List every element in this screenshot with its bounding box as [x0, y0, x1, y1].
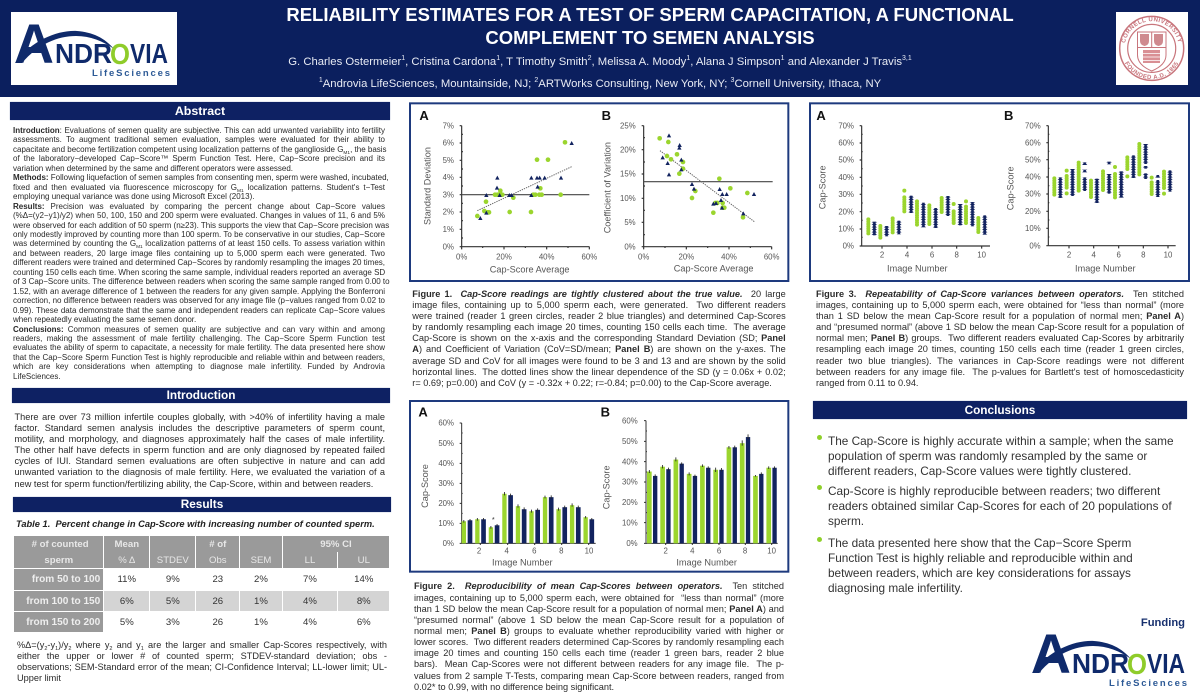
chart: 2A bars less than normal: 30% — [438, 479, 454, 488]
chart: 2A bars less than normal — [418, 405, 596, 568]
chart: 1B coefficient of variation scatter: Coefficient of Variation — [603, 142, 613, 233]
chart: 3A variance less than normal — [816, 108, 990, 274]
conclusion bullet 1: different readers, Cap-Score values were tightly clustered. — [828, 464, 1131, 478]
chart: 3A variance less than normal: A — [816, 108, 826, 123]
table 1: 5% — [166, 596, 180, 606]
chart: 2B bars presumed normal: Image Number — [676, 558, 737, 568]
chart: 2A bars less than normal: 20% — [438, 499, 454, 508]
heading: Abstract — [10, 102, 390, 120]
table 1: % Δ — [118, 554, 135, 566]
text block: introduction: The other half have defects in sperm function and are only diagnosed by repeated failed — [14, 445, 385, 455]
chart: 1B coefficient of variation scatter: 0% — [624, 242, 636, 251]
text block: abstract: 1.52, with an average difference of 1 between the readers for any given sample. Applying the Bonferroni — [13, 287, 385, 296]
text block: introduction: unwanted variation to the diagnosis of male fertility. Here, we evaluated the variation of a — [14, 467, 385, 477]
chart: 1A standard deviation scatter: Standard Deviation — [423, 147, 433, 225]
conclusion bullet 2: readers obtained similar Cap-Scores for each of 20 populations of — [828, 499, 1172, 513]
figure 2 caption: values from 2 sample T-Tests, comparing mean Cap-Score between readers, ranged from — [414, 671, 784, 681]
chart: 2A bars less than normal: 2 — [477, 547, 481, 556]
text block: abstract: correction, no difference between readers was observed for any image file (p−values ranged from 0.02 to — [13, 296, 385, 305]
chart: 2A bars less than normal: 0% — [443, 539, 454, 548]
chart: 2B bars presumed normal: 2 — [663, 547, 668, 556]
figure 1 caption: horizontal lines. The dotted lines show the linear dependence of the SD (y = 0.06x + 0.02; — [412, 367, 786, 377]
table 1: 7% — [303, 574, 317, 585]
table 1: 6% — [120, 596, 134, 606]
logo: Cornell University seal — [1116, 12, 1188, 85]
chart: 3A variance less than normal: 30% — [838, 190, 854, 199]
chart: 3B variance presumed normal: 40% — [1025, 173, 1041, 182]
logo: Cornell University seal: CORNELL UNIVERSITY — [1121, 17, 1182, 42]
chart: 2B bars presumed normal: 40% — [622, 457, 638, 466]
panel: figure 1 charts — [409, 102, 790, 282]
table 1: UL — [358, 554, 370, 566]
table footnote: either the upper or lower # of counted sperm; STDEV-standard deviation; obs - — [17, 651, 387, 661]
chart: 3A variance less than normal: 4 — [905, 251, 910, 260]
chart: 1A standard deviation scatter: 3% — [443, 190, 454, 199]
figure 1 caption: A) and Coefficient of Variation (CoV=SD/mean; Panel B) are shown on the y-axes. The — [412, 344, 786, 354]
text block: abstract: readers, making the assessment of male fertility challenging. The Cap−Score Sperm Function test — [13, 334, 385, 343]
chart: 1B coefficient of variation scatter: 0% — [638, 252, 649, 261]
chart: 2B bars presumed normal: B — [601, 405, 610, 420]
text block: abstract: of the laboratory−developed Cap−Score™ Sperm Function Test. Here, Cap−Score precision and its — [13, 154, 385, 163]
logo: Androvia bottom right: LifeSciences — [1109, 678, 1187, 689]
chart: 3B variance presumed normal: 8 — [1141, 251, 1146, 260]
conclusion bullet 3: Function Test is highly reliable and reproducible within and — [828, 550, 1133, 564]
chart: 3A variance less than normal: 0% — [843, 242, 854, 251]
chart: 1A standard deviation scatter: A — [419, 108, 429, 123]
text block: abstract: variation when determined by the same and different operators were assessed. — [13, 164, 293, 173]
chart: 1B coefficient of variation scatter: 25% — [620, 121, 636, 130]
conclusion bullet 2: sperm. — [828, 514, 864, 528]
figure 2 caption: image 20 times and counting 150 cells each time (reader 1 green bars, reader 2 blue — [414, 648, 784, 658]
logo: Androvia top left: VIA — [130, 38, 168, 69]
heading: Introduction — [12, 388, 390, 403]
table 1: 11% — [118, 574, 136, 585]
figure 3 caption: between readers for any image file. The p-values for Bartlett's test of homoscedasticity — [816, 367, 1184, 377]
table 1: 4% — [303, 596, 317, 606]
chart: 3B variance presumed normal: 10 — [1164, 251, 1173, 260]
text block: abstract: only modestly improved by counting more than 100 sperm. To be conservative in our studies, Cap−Score — [13, 230, 385, 239]
chart: 1B coefficient of variation scatter: 20% — [678, 252, 694, 261]
figure 2 caption: Figure 2. Reproducibility of mean Cap-Scores between operators. Ten stitched — [414, 581, 784, 591]
logo: Androvia bottom right: A — [1031, 622, 1071, 685]
chart: 2A bars less than normal: 50% — [438, 439, 454, 448]
table 1: 8% — [357, 596, 371, 606]
text block: abstract: which are key considerations when attempting to diagnose male infertility. Funded by Androvia — [13, 362, 385, 371]
chart: 1A standard deviation scatter: 20% — [496, 252, 512, 261]
figure 2 caption: normal men; Panel B) groups to evaluate whether reproducibility varied with higher or — [414, 626, 784, 636]
text block: abstract: was determined by counting the GM1 localization patterns of at least 150 cells. To assess variation within — [13, 239, 385, 250]
chart: 1A standard deviation scatter: 6% — [443, 139, 454, 148]
text block: abstract: capacitate and become fertilization competent using localization patterns of the ganglioside GM1, the basis — [13, 145, 387, 156]
figure 2 caption: lower scores. Two different readers determined Cap-Scores by randomly resampling each — [414, 637, 784, 647]
table 1: sperm — [44, 554, 73, 566]
chart: 1A standard deviation scatter: 7% — [443, 121, 454, 130]
table 1: 9% — [166, 574, 180, 585]
conclusion bullet 1: population of sperm was randomly resampled by the same or — [828, 449, 1147, 463]
text block: introduction: factor. Standard semen analysis includes the descriptive parameters of sperm count, — [14, 423, 385, 433]
conclusion bullet 3: diagnosing male infertility. — [828, 580, 963, 594]
chart: 3B variance presumed normal: 50% — [1025, 155, 1041, 164]
table 1: 26 — [212, 596, 223, 606]
table 1: Obs — [209, 554, 227, 566]
logo: Androvia bottom right — [1031, 622, 1187, 689]
chart: 1A standard deviation scatter: 2% — [443, 208, 454, 217]
table 1: STDEV — [157, 554, 189, 566]
chart: 2B bars presumed normal: 30% — [622, 478, 638, 487]
chart: 1B coefficient of variation scatter: 10% — [620, 194, 636, 203]
chart: 2A bars less than normal: Cap-Score — [420, 464, 430, 508]
chart: 2B bars presumed normal: 0% — [626, 539, 638, 548]
table 1: 26 — [212, 616, 223, 628]
text block: abstract: Results: Precision was evaluated by comparing the percent change about Cap−Score values — [13, 202, 385, 211]
chart: 2B bars presumed normal — [601, 405, 778, 568]
logo: Androvia top left: LifeSciences — [92, 68, 170, 79]
conclusion bullet 3: The data presented here show that the Cap−Score Sperm — [828, 536, 1131, 550]
chart: 3A variance less than normal: Image Number — [887, 264, 948, 274]
chart: 3A variance less than normal: 10% — [838, 225, 854, 234]
figure 1 caption: Cap-Score is shown on the x-axis and the corresponding Standard Deviation (SD; Panel — [412, 333, 786, 343]
figure 3 caption — [816, 289, 1184, 388]
text block: abstract: fixed and then evaluated via fluorescence microscopy for GM1 localization patterns. Student's t−Test — [13, 183, 385, 194]
table 1: 23 — [212, 574, 223, 585]
text block: abstract: different readers were trained and determined Cap−Scores by randomly resampling the images 20 times, — [13, 258, 385, 267]
chart: 3B variance presumed normal: 20% — [1025, 207, 1041, 216]
figure 1 caption: r= 0.69; p=0.00) and CoV (y = -0.32x + 0.22; r=-0.84; p=0.00) to the Cap-Score average. — [412, 378, 772, 388]
chart: 3B variance presumed normal — [1004, 108, 1176, 274]
chart: 3B variance presumed normal: Cap-Score — [1006, 166, 1016, 210]
text block: abstract: employing unequal variance was done using Microsoft Excel (2013). — [13, 192, 254, 201]
table caption: Table 1. Percent change in Cap-Score with increasing number of counted sperm. — [16, 519, 375, 529]
chart: 3B variance presumed normal: B — [1004, 108, 1013, 123]
table 1 — [14, 536, 389, 632]
title: RELIABILITY ESTIMATES FOR A TEST OF SPERM CAPACITATION, A FUNCTIONAL — [286, 4, 1014, 25]
heading: Conclusions: Conclusions — [965, 403, 1035, 417]
logo: Androvia bottom right: VIA — [1147, 648, 1185, 679]
text block: introduction: motility, and morphology, and diagnoses approximately half the cases of male infertility. — [14, 434, 385, 444]
table 1: from 100 to 150 — [26, 596, 100, 606]
chart: 2B bars presumed normal: 20% — [622, 498, 638, 507]
chart: 3A variance less than normal: 6 — [930, 251, 935, 260]
heading: Results: Results — [181, 497, 223, 511]
text block: abstract: counting 150 cells each time. When scoring the same sample, individual readers reported an average SD — [13, 268, 385, 277]
text block: introduction: There are over 73 million infertile couples globally, with >40% of infertility having a male — [14, 412, 385, 422]
chart: 2A bars less than normal: * — [492, 515, 495, 524]
panel: figure 2 charts — [409, 400, 790, 573]
chart: 1B coefficient of variation scatter: Cap-Score Average — [674, 264, 754, 274]
text block: abstract: that the Cap−Score Sperm Function Test is highly reproducible and reliable within and between readers, — [13, 353, 385, 362]
header band — [0, 0, 1200, 97]
text block: abstract: were observed for each addition of 50 sperm (n≥23). This supports the view that Cap−Score precision was — [13, 221, 389, 230]
chart: 1B coefficient of variation scatter: 60% — [764, 252, 780, 261]
chart: 2A bars less than normal: Image Number — [492, 558, 553, 568]
figure 3 caption: Figure 3. Repeatability of Cap-Score variances between operators. Ten stitched — [816, 289, 1184, 299]
chart: 3A variance less than normal: 8 — [954, 251, 959, 260]
chart: 3A variance less than normal: 40% — [838, 173, 854, 182]
chart: 1A standard deviation scatter: 0% — [456, 252, 467, 261]
text block: abstract: evaluates the ability of sperm to capacitate, a necessity for male fertility. The data presented here show — [13, 343, 385, 352]
chart: 1A standard deviation scatter — [419, 108, 597, 275]
figure 3 caption: images, containing up to 5,000 sperm each, were obtained for “less than normal” (more — [816, 300, 1184, 310]
table 1: Mean — [115, 538, 139, 550]
chart: 2B bars presumed normal: 6 — [717, 547, 722, 556]
authors: G. Charles Ostermeier1, Cristina Cardona1, T Timothy Smith2, Melissa A. Moody1, Alana J Simpson1 and Alexander J Travis3,1 — [288, 55, 912, 68]
text block: introduction: cycles of IUI. Standard semen evaluations are often subjective in nature and can add — [14, 456, 385, 466]
chart: 2A bars less than normal: 4 — [504, 547, 509, 556]
chart: 2B bars presumed normal: 8 — [743, 547, 748, 556]
figure 3 caption: than 1 SD below the mean Cap-Score result for a population of normal men; Panel A) — [816, 311, 1184, 321]
table 1: 1% — [254, 596, 268, 606]
table 1: # of counted — [32, 538, 89, 550]
chart: 2B bars presumed normal: 50% — [622, 437, 638, 446]
text block: abstract: Conclusions: Common measures of semen quality are subjective and can vary within and among — [13, 325, 385, 334]
table 1: 4% — [303, 616, 317, 628]
table 1: 6% — [357, 616, 371, 628]
chart: 3A variance less than normal: 2 — [880, 251, 884, 260]
chart: 3B variance presumed normal: 0% — [1029, 241, 1041, 250]
table 1: from 50 to 100 — [32, 574, 100, 585]
chart: 3B variance presumed normal: 2 — [1067, 251, 1071, 260]
chart: 2A bars less than normal: 10 — [585, 547, 594, 556]
logo: Androvia top left — [11, 12, 177, 85]
chart: 3A variance less than normal: 70% — [838, 121, 854, 130]
conclusion bullet 3 — [817, 536, 1133, 594]
figure 1 caption — [412, 289, 786, 388]
text block: abstract: Methods: Following liquefaction of semen samples from consenting men, sperm were washed, incubated, — [13, 173, 389, 182]
table footnote — [17, 640, 387, 683]
chart: 3A variance less than normal: 10 — [977, 251, 987, 260]
chart: 3B variance presumed normal: 30% — [1025, 190, 1041, 199]
conclusion bullet 2: Cap-Score is highly reproducible between readers; two different — [828, 484, 1160, 498]
figure 1 caption: image files, containing up to 5,000 sperm each, were generated. Two different readers — [412, 300, 786, 310]
figure 3 caption: resampling each image 20 times, counting 150 cells each time (reader 1 green circles, — [816, 344, 1184, 354]
figure 2 caption: than 1 SD below the mean Cap-Score result for a population of normal men; Panel A) and — [414, 604, 784, 614]
table footnote: %Δ=(y2-y1)/y2 where y2 and y1 are the larger and smaller Cap-Scores respectively, with — [17, 640, 387, 652]
chart: 2A bars less than normal: 8 — [559, 547, 564, 556]
text block: abstract: when repeatedly evaluating the same semen donor. — [13, 315, 196, 324]
table 1: from 150 to 200 — [26, 616, 100, 628]
text block: abstract — [13, 126, 390, 381]
chart: 3B variance presumed normal: 4 — [1091, 251, 1096, 260]
figure 1 caption: were trained (reader 1 green circles, reader 2 blue triangles) and determined Cap-Scores — [412, 311, 786, 321]
text block: abstract: 0.99). These data demonstrate that the same and independent readers can replicate Cap−Score values — [13, 306, 385, 315]
figure 3 caption: reader two blue triangles). The variances in Cap-Score readings were not different — [816, 356, 1184, 366]
text block: introduction — [14, 412, 385, 489]
figure 2 caption — [414, 581, 784, 692]
chart: 1A standard deviation scatter: 40% — [539, 252, 555, 261]
chart: 3A variance less than normal: 50% — [838, 156, 854, 165]
logo: Androvia top left: A — [14, 12, 54, 75]
chart: 1B coefficient of variation scatter: 40% — [721, 252, 737, 261]
figure 2 caption: images, containing up to 5,000 sperm each, were obtained for “less than normal” (more — [414, 593, 784, 603]
conclusion bullet 2 — [817, 484, 1172, 528]
chart: 3A variance less than normal: 60% — [838, 139, 854, 148]
affiliations: 1Androvia LifeSciences, Mountainside, NJ; 2ARTWorks Consulting, New York, NY; 3Cornell University, Ithaca, NY — [319, 77, 881, 90]
table 1: 3% — [166, 616, 180, 628]
heading: Abstract: Abstract — [175, 104, 225, 118]
table footnote: observations; SEM-Standard error of the mean; CI-Confidence Interval; LL-lower limit; UL- — [17, 662, 387, 672]
chart: 2A bars less than normal: A — [418, 405, 428, 420]
chart: 2B bars presumed normal: 4 — [690, 547, 695, 556]
figure 3 caption: and “presumed normal” (above 1 SD below the mean Cap-Score result for a population of — [816, 322, 1184, 332]
text block: abstract: LifeSciences. — [13, 372, 61, 381]
table 1: SEM — [251, 554, 271, 566]
chart: 1A standard deviation scatter: 1% — [443, 225, 454, 234]
conclusion bullet 1 — [817, 434, 1174, 478]
title — [286, 4, 1014, 48]
chart: 2A bars less than normal: 6 — [532, 547, 537, 556]
text block: abstract: (%Δ=(y2−y1)/y2) when 50, 100, 150 and 200 sperm were evaluated. Changes in values of 11, 6 and 5% — [13, 211, 385, 220]
text block: abstract: Introduction: Evaluations of semen quality are subjective. This can add unwanted variability into fertility — [13, 126, 385, 135]
text block: abstract: assessments. To augment traditional semen evaluation, samples were evaluated for their ability to — [13, 135, 385, 144]
funding label: Funding — [1141, 617, 1185, 629]
chart: 2B bars presumed normal: Cap-Score — [601, 465, 611, 509]
chart: 2B bars presumed normal: 10 — [767, 547, 777, 556]
table 1: 2% — [254, 574, 268, 585]
chart: 1A standard deviation scatter: Cap-Score Average — [490, 265, 570, 275]
conclusion bullet 1: The Cap-Score is highly accurate within a sample; when the same — [828, 434, 1174, 448]
heading: Introduction: Introduction — [167, 388, 235, 402]
chart: 2A bars less than normal: 60% — [438, 419, 454, 428]
logo: Cornell University seal: FOUNDED A.D. 1865 — [1124, 61, 1178, 80]
chart: 2A bars less than normal: 40% — [438, 459, 454, 468]
conclusion bullet 3: between readers, which are key considerations for assays — [828, 566, 1131, 580]
table 1: 14% — [354, 574, 373, 585]
chart: 1B coefficient of variation scatter — [602, 108, 780, 274]
figure 1 caption: average SD and CoV for all images were found to be 3 and 13 and are shown by the solid — [412, 356, 786, 366]
table 1: 1% — [254, 616, 268, 628]
chart: 3A variance less than normal: 20% — [838, 207, 854, 216]
figure 2 caption: “presumed normal” (above 1 SD below the mean Cap-Score result for a population of — [414, 615, 784, 625]
text block: introduction: new test for sperm function/fertilizing ability, the Cap-Score, within and between readers. — [14, 479, 373, 489]
figure 3 caption: normal men; Panel B) groups. Two different readers evaluated Cap-Scores by arbitrarily — [816, 333, 1184, 343]
chart: 1B coefficient of variation scatter: 5% — [624, 218, 636, 227]
table 1: # of — [209, 538, 226, 550]
chart: 2B bars presumed normal: 60% — [622, 416, 638, 425]
chart: 3A variance less than normal: Cap-Score — [817, 165, 827, 209]
text block: abstract: and between readers, 20 large image files containing up to 5,000 sperm each were generated. Two — [13, 249, 385, 258]
table footnote: Upper limit — [17, 673, 61, 683]
chart: 1A standard deviation scatter: 5% — [443, 156, 454, 165]
logo: Androvia top left: NDR — [55, 38, 112, 69]
chart: 1A standard deviation scatter: 0% — [443, 242, 454, 251]
title: COMPLEMENT TO SEMEN ANALYSIS — [485, 27, 815, 48]
text block: abstract: of 3 Cap−Score units. The difference between readers when scoring the same sample ranged from 0.00 to — [13, 277, 390, 286]
chart: 1A standard deviation scatter: 4% — [443, 173, 454, 182]
logo: Androvia bottom right: O — [1127, 649, 1147, 681]
chart: 3B variance presumed normal: 6 — [1116, 251, 1121, 260]
heading: Results — [13, 497, 391, 512]
table 1: 5% — [120, 616, 134, 628]
table 1: 95% CI — [320, 538, 352, 550]
figure 2 caption: 0.02* to 0.99, with no difference being significant. — [414, 682, 614, 692]
heading: Conclusions — [813, 401, 1187, 419]
chart: 2A bars less than normal: 10% — [438, 519, 454, 528]
chart: 3B variance presumed normal: 10% — [1025, 224, 1041, 233]
panel: figure 3 charts — [809, 102, 1190, 282]
chart: 1B coefficient of variation scatter: B — [602, 108, 611, 123]
logo: Androvia bottom right: NDR — [1072, 648, 1129, 679]
chart: 3B variance presumed normal: Image Number — [1075, 264, 1136, 274]
figure 1 caption: by randomly resampling each image 20 times, counting 150 cells each time. The average — [412, 322, 786, 332]
chart: 3B variance presumed normal: 70% — [1025, 121, 1041, 130]
figure 3 caption: ranged from 0.11 to 0.94. — [816, 378, 918, 388]
table 1: LL — [305, 554, 315, 566]
chart: 3B variance presumed normal: 60% — [1025, 138, 1041, 147]
chart: 1B coefficient of variation scatter: 15% — [620, 170, 636, 179]
logo: Androvia top left: O — [110, 39, 130, 71]
chart: 2B bars presumed normal: 10% — [622, 518, 638, 527]
chart: 1A standard deviation scatter: 60% — [581, 252, 597, 261]
figure 2 caption: bars). Mean Cap-Scores were not different between readers for any image file. The p- — [414, 659, 784, 669]
figure 1 caption: Figure 1. Cap-Score readings are tightly clustered about the true value. 20 large — [412, 289, 786, 299]
chart: 1B coefficient of variation scatter: 20% — [620, 145, 636, 154]
